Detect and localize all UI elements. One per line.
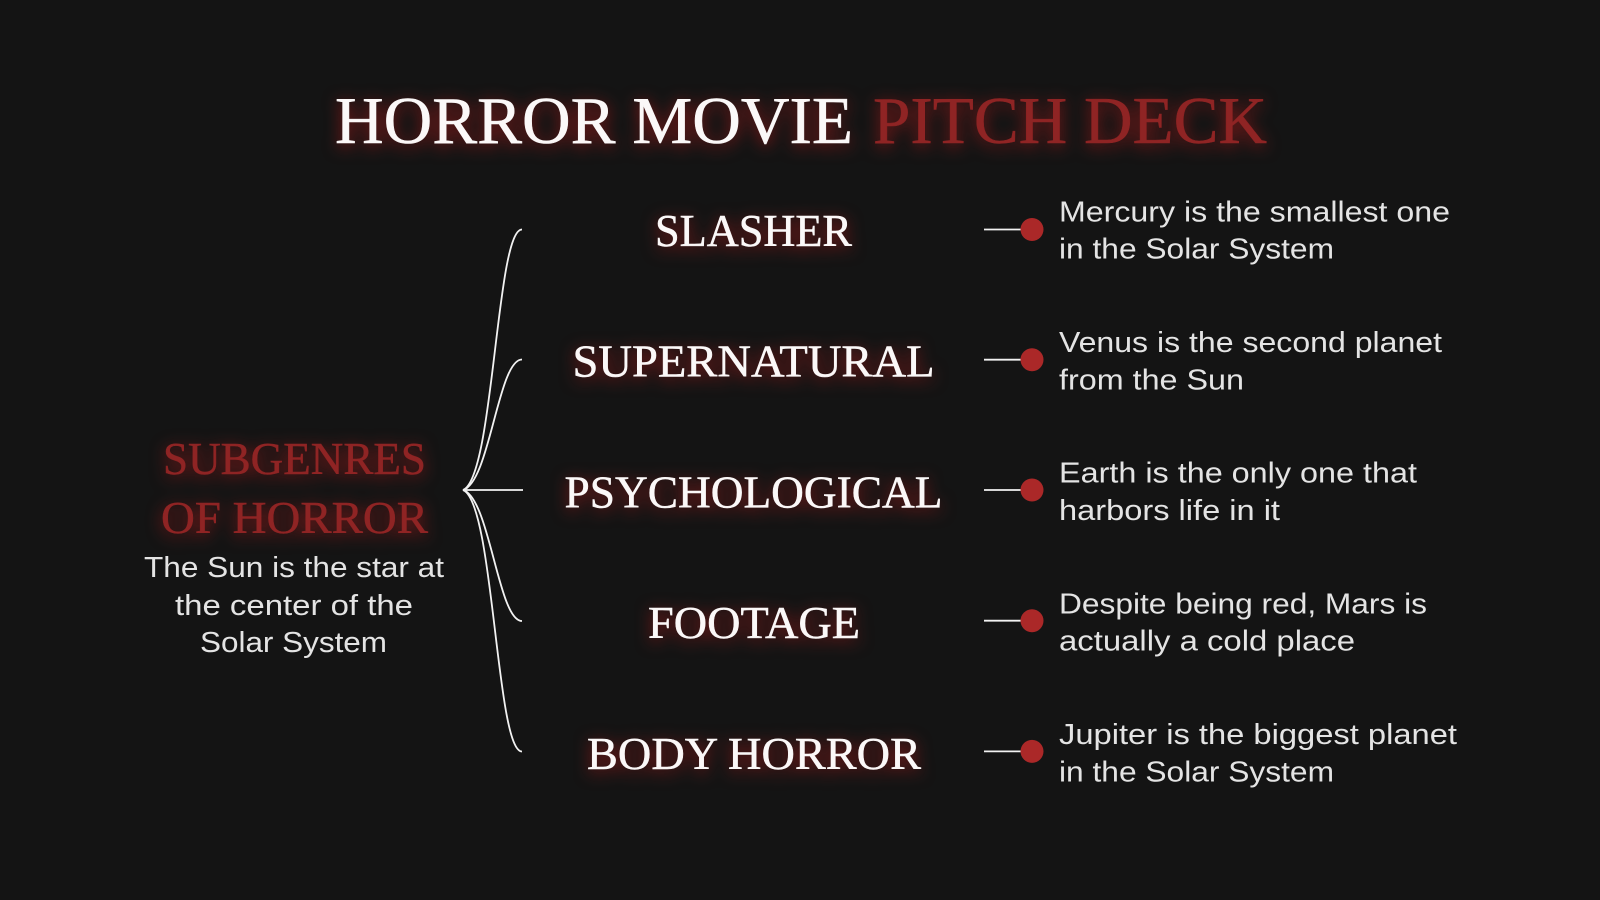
connector dot [984,478,1044,502]
connector dot [984,740,1044,763]
description: venus: Venus is the second planet [1059,327,1442,359]
heading: subgenres of horror: OF HORROR [161,493,428,543]
genre label: body horror: BODY HORROR [587,729,921,779]
genre label: footage: FOOTAGE [648,598,860,648]
genre label: slasher: SLASHER [655,206,852,256]
connector dot [984,348,1044,371]
panel: subgenres of horror intro [144,434,444,659]
text block: sun description: the center of the [175,590,413,622]
description: mercury: in the Solar System [1059,234,1334,266]
text block: sun description: Solar System [200,627,387,659]
text block: sun description: The Sun is the star at [144,552,444,584]
row: psychological [564,458,1417,527]
description: earth: harbors life in it [1059,495,1280,527]
genre label: supernatural: SUPERNATURAL [572,337,934,387]
genre label: psychological: PSYCHOLOGICAL [564,467,942,517]
row: supernatural [572,327,1442,396]
text block: sun description [144,552,444,659]
description: jupiter [1059,719,1457,788]
heading: subgenres of horror [161,434,428,543]
description: jupiter: Jupiter is the biggest planet [1059,719,1457,751]
row: slasher [655,196,1450,266]
heading: subgenres of horror: SUBGENRES [163,434,426,484]
description: earth [1059,458,1417,527]
description: mars [1059,588,1427,658]
connector dot [984,609,1044,632]
connector dot [984,218,1044,241]
description: venus: from the Sun [1059,364,1244,396]
title [335,84,1267,158]
description: mercury: Mercury is the smallest one [1059,196,1450,228]
description: venus [1059,327,1442,396]
description: jupiter: in the Solar System [1059,756,1334,788]
description: mercury [1059,196,1450,266]
title: HORROR MOVIE [335,84,853,158]
bracket connector: branching curves [463,230,523,752]
row: body horror [587,719,1457,788]
description: mars: actually a cold place [1059,626,1355,658]
row: footage [648,588,1427,658]
description: earth: Earth is the only one that [1059,458,1417,490]
description: mars: Despite being red, Mars is [1059,588,1427,620]
title: PITCH DECK [873,84,1267,158]
